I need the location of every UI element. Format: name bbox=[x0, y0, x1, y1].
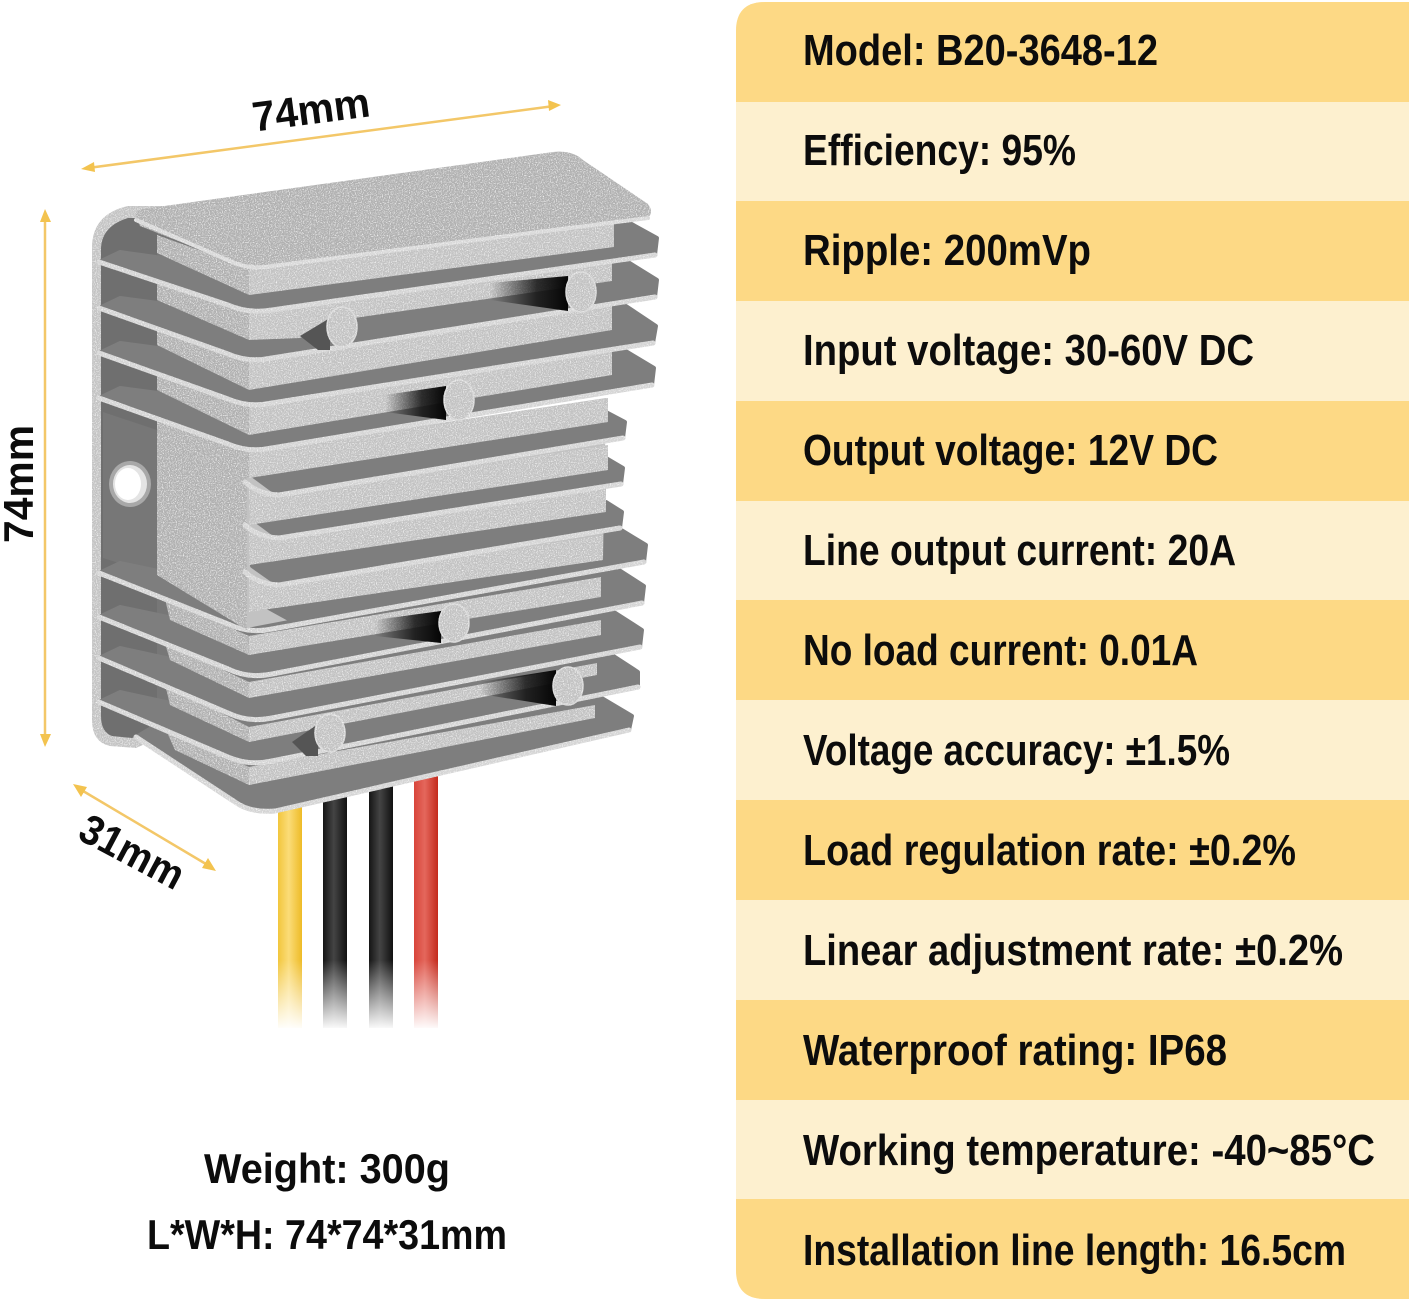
band: ripple bbox=[736, 201, 1409, 301]
specification panel bbox=[736, 2, 1409, 1299]
spec: output voltage: Output voltage: 12V DC bbox=[803, 426, 1218, 475]
band: model bbox=[736, 2, 1409, 102]
dimension label: 31mm: 31mm bbox=[72, 805, 193, 899]
spec: waterproof rating: Waterproof rating: IP68 bbox=[803, 1026, 1227, 1075]
dimension arrow: left height bbox=[40, 209, 51, 747]
screw shadows bbox=[292, 276, 568, 756]
band: waterproof bbox=[736, 1000, 1409, 1100]
screws bbox=[315, 272, 596, 752]
mounting flange bbox=[92, 206, 165, 748]
spec: no load current: No load current: 0.01A bbox=[803, 626, 1198, 675]
fin 5 bbox=[99, 350, 654, 478]
fin 3 bbox=[99, 262, 657, 390]
dimension arrow: top width bbox=[81, 100, 561, 172]
wire: black 2 bbox=[369, 785, 393, 1028]
fin 7 bbox=[245, 458, 623, 565]
spec: linear adjustment rate: Linear adjustment rate: ±0.2% bbox=[803, 926, 1343, 975]
band: load regulation bbox=[736, 800, 1409, 900]
spec: model: Model: B20-3648-12 bbox=[803, 26, 1158, 75]
dimension arrow: depth bbox=[73, 784, 216, 871]
wire: red bbox=[414, 770, 438, 1028]
converter heatsink body bbox=[92, 152, 657, 811]
fin 11 bbox=[99, 612, 642, 742]
fin 13 bbox=[136, 697, 632, 811]
fin 12 bbox=[99, 655, 638, 785]
fin 10 bbox=[99, 568, 644, 698]
central body bbox=[157, 398, 606, 630]
mounting hole bbox=[109, 461, 151, 507]
wires bbox=[270, 770, 446, 1030]
spec: load regulation rate: Load regulation rate: ±0.2% bbox=[803, 826, 1296, 875]
spec: voltage accuracy: Voltage accuracy: ±1.5% bbox=[803, 726, 1230, 775]
wire: black 1 bbox=[323, 790, 347, 1028]
band: output voltage bbox=[736, 401, 1409, 501]
spec: efficiency: Efficiency: 95% bbox=[803, 126, 1076, 175]
fin 9 bbox=[99, 528, 646, 655]
top plate bbox=[136, 152, 651, 267]
fin 6 bbox=[245, 412, 625, 525]
body backing bbox=[157, 218, 300, 790]
panel background bbox=[736, 2, 1409, 1299]
dimensions caption: L*W*H: 74*74*31mm bbox=[147, 1211, 507, 1258]
fin 2 bbox=[99, 222, 657, 340]
spec: line output current: Line output current: 20A bbox=[803, 526, 1236, 575]
top plate side strip bbox=[157, 222, 614, 295]
spec: ripple: Ripple: 200mVp bbox=[803, 226, 1091, 275]
wire: yellow bbox=[278, 800, 302, 1028]
band: no load current bbox=[736, 600, 1409, 700]
weight caption: Weight: 300g bbox=[204, 1145, 450, 1192]
fin 4 bbox=[99, 306, 656, 435]
dimension label: top 74mm: 74mm bbox=[249, 79, 372, 141]
spec: input voltage: Input voltage: 30-60V DC bbox=[803, 326, 1254, 375]
band: installation line length bbox=[736, 1199, 1409, 1299]
fin 8 bbox=[245, 502, 622, 612]
